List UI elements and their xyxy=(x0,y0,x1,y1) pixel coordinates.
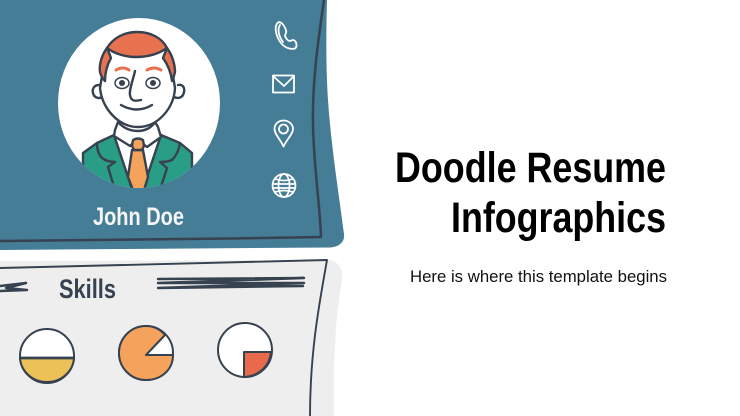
title xyxy=(395,144,666,242)
avatar: man in suit xyxy=(83,32,192,195)
panel: skills card xyxy=(0,260,342,416)
chart: mostly filled circle xyxy=(119,326,173,380)
panel: profile card xyxy=(0,0,344,250)
chart: quarter circle xyxy=(218,323,272,377)
heading: Skills xyxy=(59,274,116,304)
icon: phone xyxy=(276,22,296,49)
title: Doodle Resume xyxy=(395,144,666,192)
icon: globe xyxy=(272,174,296,197)
icon: location pin xyxy=(274,120,293,146)
title: Infographics xyxy=(451,194,666,242)
name: John Doe xyxy=(93,203,184,231)
avatar disc xyxy=(58,18,220,188)
scribble lines xyxy=(0,278,304,291)
chart: half-filled circle xyxy=(20,329,74,383)
subtitle: Here is where this template begins xyxy=(410,267,667,286)
icon: envelope xyxy=(273,76,294,92)
